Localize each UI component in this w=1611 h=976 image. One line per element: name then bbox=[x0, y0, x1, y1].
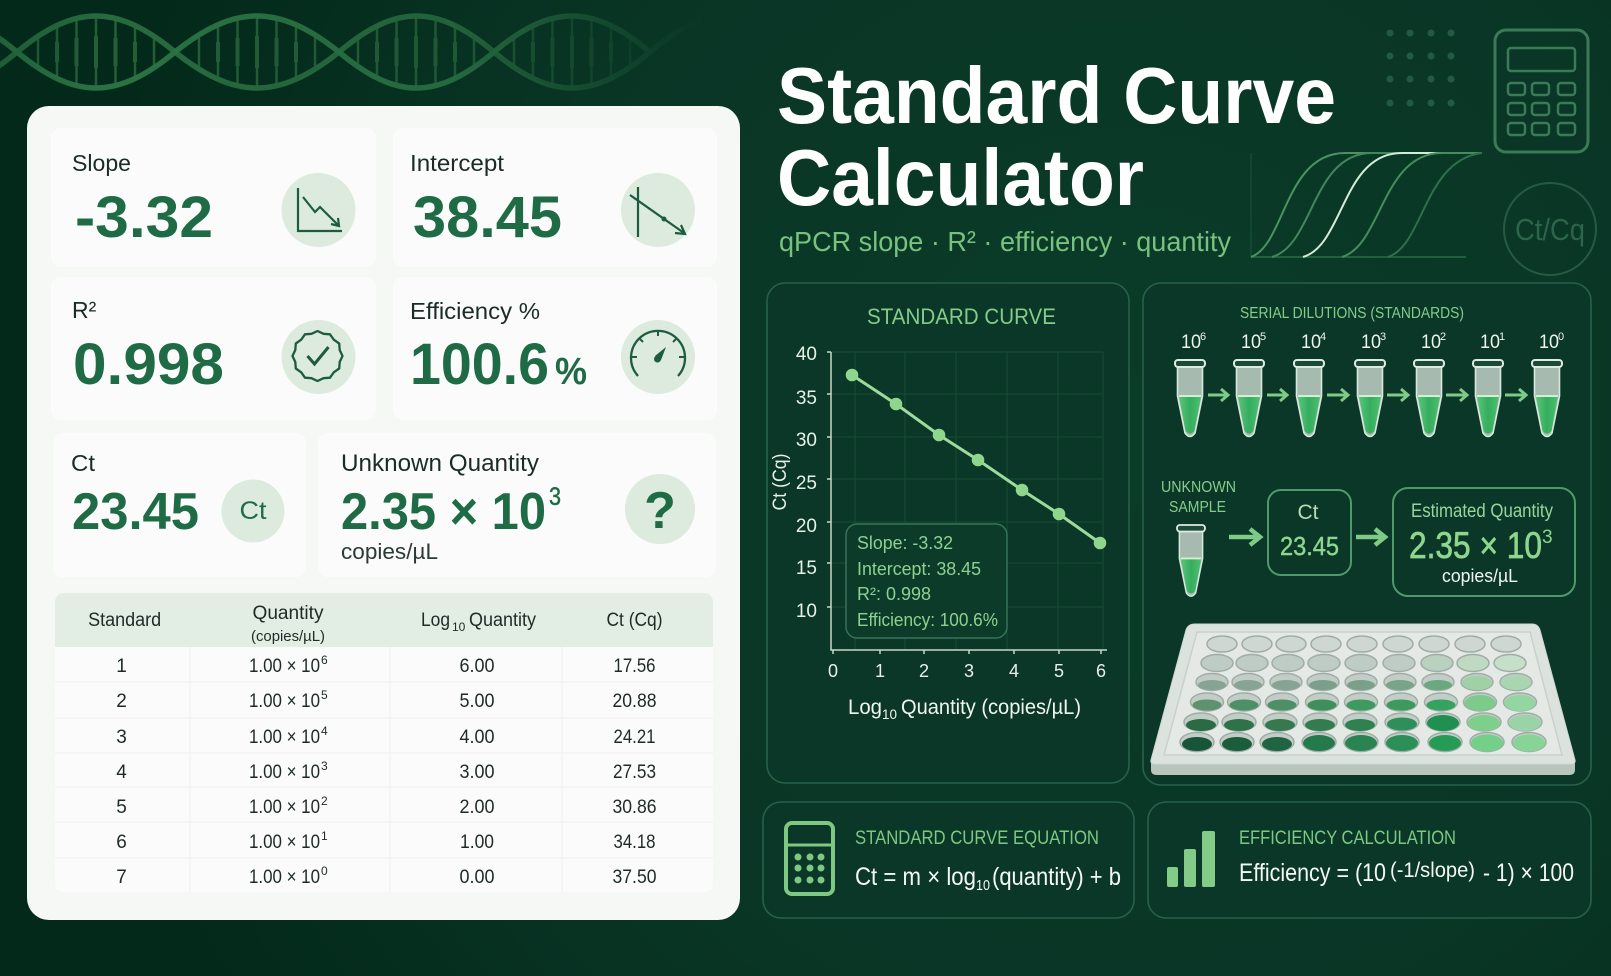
table row 5: 2 bbox=[321, 794, 328, 808]
unknown quantity value: 2.35 × 10 bbox=[341, 483, 546, 541]
table header bbox=[88, 603, 663, 645]
y axis labels: 30 bbox=[796, 430, 817, 451]
table row 3: 1.00 × 10 bbox=[249, 727, 320, 748]
card: ct bbox=[53, 433, 306, 577]
equation: 10 bbox=[976, 877, 990, 894]
dilution labels: 10 bbox=[1480, 332, 1500, 353]
table row 4: 3 bbox=[321, 759, 328, 773]
icon: gauge bbox=[621, 320, 695, 394]
table header: 10 bbox=[452, 620, 466, 634]
table row 6 bbox=[116, 829, 656, 853]
unknown sample label: UNKNOWN bbox=[1161, 479, 1236, 496]
slope value: -3.32 bbox=[75, 185, 213, 250]
icon: question mark: ? bbox=[644, 482, 676, 540]
efficiency heading: EFFICIENCY CALCULATION bbox=[1239, 828, 1456, 849]
dilution labels: 10 bbox=[1181, 332, 1201, 353]
icon: ct badge: Ct bbox=[240, 497, 267, 525]
table row 2: 5.00 bbox=[460, 691, 494, 712]
table row 4: 4 bbox=[116, 762, 127, 783]
fit statistics box: Slope: -3.32 bbox=[857, 533, 953, 553]
subtitle: qPCR slope · R² · efficiency · quantity bbox=[779, 226, 1231, 257]
table row 2: 20.88 bbox=[612, 691, 656, 712]
dilution labels: 6 bbox=[1200, 331, 1206, 343]
y axis labels: 25 bbox=[796, 473, 817, 494]
title bbox=[777, 51, 1336, 222]
table row 1: 1.00 × 10 bbox=[249, 656, 320, 677]
x axis title bbox=[848, 696, 1081, 722]
table row 2: 5 bbox=[321, 688, 328, 702]
table row 7: 0.00 bbox=[460, 867, 494, 888]
x axis labels: 0 bbox=[828, 661, 838, 681]
x axis labels: 3 bbox=[964, 661, 974, 681]
DNA helix decoration bbox=[0, 16, 705, 88]
x axis labels: 1 bbox=[875, 661, 885, 681]
dilution labels: 10 bbox=[1361, 332, 1381, 353]
dilution labels: 10 bbox=[1421, 332, 1441, 353]
table row 3: 3 bbox=[116, 727, 127, 748]
efficiency value: % bbox=[555, 351, 587, 393]
card: unknown quantity bbox=[318, 433, 716, 577]
table row 6: 34.18 bbox=[614, 832, 656, 853]
dilution labels: 2 bbox=[1440, 331, 1446, 343]
amplification curves bbox=[1251, 153, 1482, 257]
table row 1: 1 bbox=[116, 656, 127, 677]
equation: (quantity) + b bbox=[992, 863, 1121, 891]
unknown sample label: SAMPLE bbox=[1169, 499, 1226, 516]
unknown quantity unit: copies/µL bbox=[341, 539, 438, 564]
efficiency formula: Efficiency = (10 bbox=[1239, 859, 1386, 887]
x axis title: Log bbox=[848, 696, 882, 719]
estimated quantity box: copies/µL bbox=[1442, 566, 1518, 586]
icon: question mark bbox=[625, 474, 695, 544]
intercept value: 38.45 bbox=[413, 185, 562, 250]
ct result box: Ct bbox=[1298, 501, 1319, 524]
panel: serial dilutions and plate bbox=[1143, 283, 1591, 785]
table header: Standard bbox=[88, 610, 161, 631]
x axis labels: 6 bbox=[1096, 661, 1106, 681]
efficiency formula: (-1/slope) bbox=[1390, 859, 1475, 882]
efficiency formula bbox=[1239, 859, 1574, 887]
dilutions heading: SERIAL DILUTIONS (STANDARDS) bbox=[1240, 305, 1464, 322]
estimated quantity box bbox=[1393, 488, 1575, 596]
table row 4: 27.53 bbox=[613, 762, 656, 783]
dilution labels: 10 bbox=[1539, 332, 1559, 353]
y axis labels: 40 bbox=[796, 344, 817, 365]
icon: intercept line bbox=[621, 173, 695, 247]
table row 7 bbox=[116, 864, 656, 888]
table row 3 bbox=[116, 724, 656, 748]
y axis labels: 15 bbox=[796, 558, 817, 579]
badge: Ct/Cq: Ct/Cq bbox=[1515, 212, 1585, 247]
table header: Quantity bbox=[252, 603, 324, 624]
line chart bbox=[770, 344, 1107, 722]
table row 1 bbox=[116, 653, 656, 677]
efficiency label: Efficiency % bbox=[410, 298, 540, 324]
fit statistics box: Efficiency: 100.6% bbox=[857, 610, 998, 630]
table row 4 bbox=[116, 759, 656, 783]
x axis labels bbox=[828, 661, 1106, 681]
icon: bar chart bbox=[1167, 831, 1215, 887]
table row 3: 4.00 bbox=[460, 727, 494, 748]
r squared value: 0.998 bbox=[73, 332, 224, 397]
arrow: ct to quantity bbox=[1356, 529, 1385, 545]
icon: calculator outline bbox=[1495, 30, 1588, 152]
dilution labels: 4 bbox=[1320, 331, 1326, 343]
efficiency value: 100.6 bbox=[410, 332, 549, 397]
dilution labels bbox=[1181, 331, 1564, 353]
y axis labels: 20 bbox=[796, 516, 817, 537]
table: standards bbox=[55, 593, 713, 892]
table header: (copies/µL) bbox=[251, 628, 325, 645]
panel: standard curve equation bbox=[763, 802, 1134, 918]
slope label: Slope bbox=[72, 150, 131, 176]
table row 5: 2.00 bbox=[460, 797, 494, 818]
data line and points bbox=[846, 369, 1106, 549]
panel: efficiency calculation bbox=[1148, 802, 1591, 918]
chart heading: STANDARD CURVE bbox=[867, 304, 1056, 329]
dilution tubes bbox=[1175, 360, 1562, 436]
y axis labels: 35 bbox=[796, 388, 817, 409]
table row 5: 30.86 bbox=[612, 797, 656, 818]
badge: Ct/Cq bbox=[1504, 183, 1596, 275]
fit statistics box bbox=[846, 524, 1007, 638]
table row 7: 7 bbox=[116, 867, 127, 888]
dilution labels: 10 bbox=[1301, 332, 1321, 353]
table row 7: 37.50 bbox=[612, 867, 656, 888]
table header: Quantity bbox=[469, 610, 536, 631]
icon: check badge bbox=[282, 320, 356, 394]
table row 2: 2 bbox=[116, 691, 127, 712]
card: intercept bbox=[393, 128, 717, 267]
table row 3: 4 bbox=[321, 724, 328, 738]
arrow: sample to ct bbox=[1229, 529, 1260, 545]
table row 5: 1.00 × 10 bbox=[249, 797, 320, 818]
y axis title: Ct (Cq) bbox=[770, 454, 791, 510]
equation: Ct = m × log bbox=[855, 863, 976, 891]
table row 5 bbox=[116, 794, 656, 818]
table row 6: 6 bbox=[116, 832, 127, 853]
table row 7: 1.00 × 10 bbox=[249, 867, 320, 888]
y axis labels: 10 bbox=[796, 601, 817, 622]
table header: Ct (Cq) bbox=[606, 610, 662, 631]
well plate bbox=[1151, 624, 1575, 775]
icon: calculator bbox=[786, 823, 833, 894]
y axis labels bbox=[796, 344, 817, 622]
table row 6: 1 bbox=[321, 829, 328, 843]
table row 5: 5 bbox=[116, 797, 127, 818]
dilution arrows bbox=[1208, 389, 1526, 401]
equation bbox=[855, 863, 1121, 894]
panel: results bbox=[27, 106, 740, 920]
x axis labels: 5 bbox=[1054, 661, 1064, 681]
table row 2 bbox=[116, 688, 656, 712]
title: Calculator bbox=[777, 133, 1144, 222]
table header: Log bbox=[421, 610, 450, 631]
ct result box: 23.45 bbox=[1280, 531, 1339, 561]
dilution labels: 0 bbox=[1558, 331, 1564, 343]
unknown sample tube bbox=[1177, 525, 1205, 596]
card: efficiency bbox=[393, 277, 717, 420]
ct label: Ct bbox=[71, 450, 96, 476]
unknown quantity value: 3 bbox=[549, 483, 561, 511]
table row 7: 0 bbox=[321, 864, 328, 878]
table row 4: 3.00 bbox=[460, 762, 494, 783]
card: slope bbox=[51, 128, 376, 267]
intercept label: Intercept bbox=[410, 150, 505, 176]
x axis title: Quantity (copies/µL) bbox=[901, 696, 1081, 719]
table row 1: 6.00 bbox=[460, 656, 494, 677]
plate wells bbox=[1180, 636, 1546, 752]
title: Standard Curve bbox=[777, 51, 1336, 140]
table row 6: 1.00 bbox=[460, 832, 494, 853]
table row 1: 17.56 bbox=[614, 656, 656, 677]
dilution labels: 3 bbox=[1380, 331, 1386, 343]
estimated quantity box: Estimated Quantity bbox=[1411, 501, 1553, 522]
decorative dot grid bbox=[1386, 30, 1454, 106]
estimated quantity box: 3 bbox=[1542, 527, 1553, 548]
ct result box bbox=[1268, 490, 1351, 575]
icon: ct badge bbox=[222, 480, 284, 542]
dilution labels: 10 bbox=[1241, 332, 1261, 353]
x axis labels: 2 bbox=[919, 661, 929, 681]
panel: standard curve chart bbox=[767, 283, 1129, 783]
ct value: 23.45 bbox=[72, 483, 199, 541]
efficiency formula: - 1) × 100 bbox=[1483, 859, 1574, 887]
table row 6: 1.00 × 10 bbox=[249, 832, 320, 853]
equation heading: STANDARD CURVE EQUATION bbox=[855, 828, 1099, 849]
unknown quantity label: Unknown Quantity bbox=[341, 450, 539, 477]
table row 3: 24.21 bbox=[614, 727, 656, 748]
dilution labels: 1 bbox=[1499, 331, 1505, 343]
card: r squared bbox=[51, 277, 376, 420]
r squared label: R² bbox=[72, 297, 97, 323]
x axis labels: 4 bbox=[1009, 661, 1019, 681]
fit statistics box: R²: 0.998 bbox=[857, 584, 931, 604]
icon: slope chart bbox=[282, 173, 356, 247]
unknown sample label bbox=[1161, 479, 1236, 516]
dilution labels: 5 bbox=[1260, 331, 1266, 343]
table row 1: 6 bbox=[321, 653, 328, 667]
estimated quantity box: 2.35 × 10 bbox=[1409, 525, 1542, 566]
x axis title: 10 bbox=[882, 706, 897, 722]
fit statistics box: Intercept: 38.45 bbox=[857, 559, 981, 579]
table row 2: 1.00 × 10 bbox=[249, 691, 320, 712]
table row 4: 1.00 × 10 bbox=[249, 762, 320, 783]
